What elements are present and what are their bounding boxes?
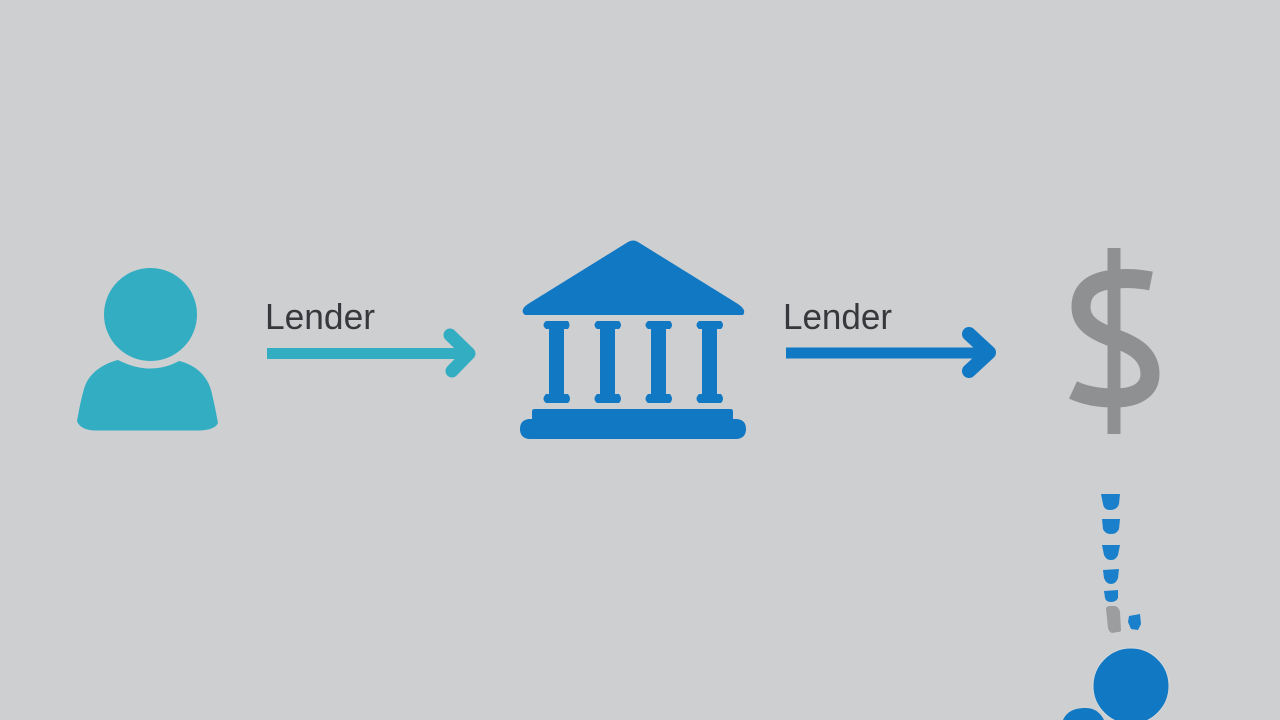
dashed drop line [1101,494,1141,630]
bank base [520,409,746,439]
label: second Lender: Lender [783,296,892,337]
arrow: person to bank [267,335,469,371]
grey drop segment [1106,606,1121,633]
arrow: bank to dollar [786,334,989,371]
large blue circle [1093,648,1169,720]
label: first Lender: Lender [265,296,375,337]
bank columns [544,321,723,403]
icon: person [77,268,218,430]
bank roof [523,240,744,315]
icon: bank [520,240,746,439]
icon: dollar sign [1073,248,1151,434]
small blue circle [1063,708,1104,720]
